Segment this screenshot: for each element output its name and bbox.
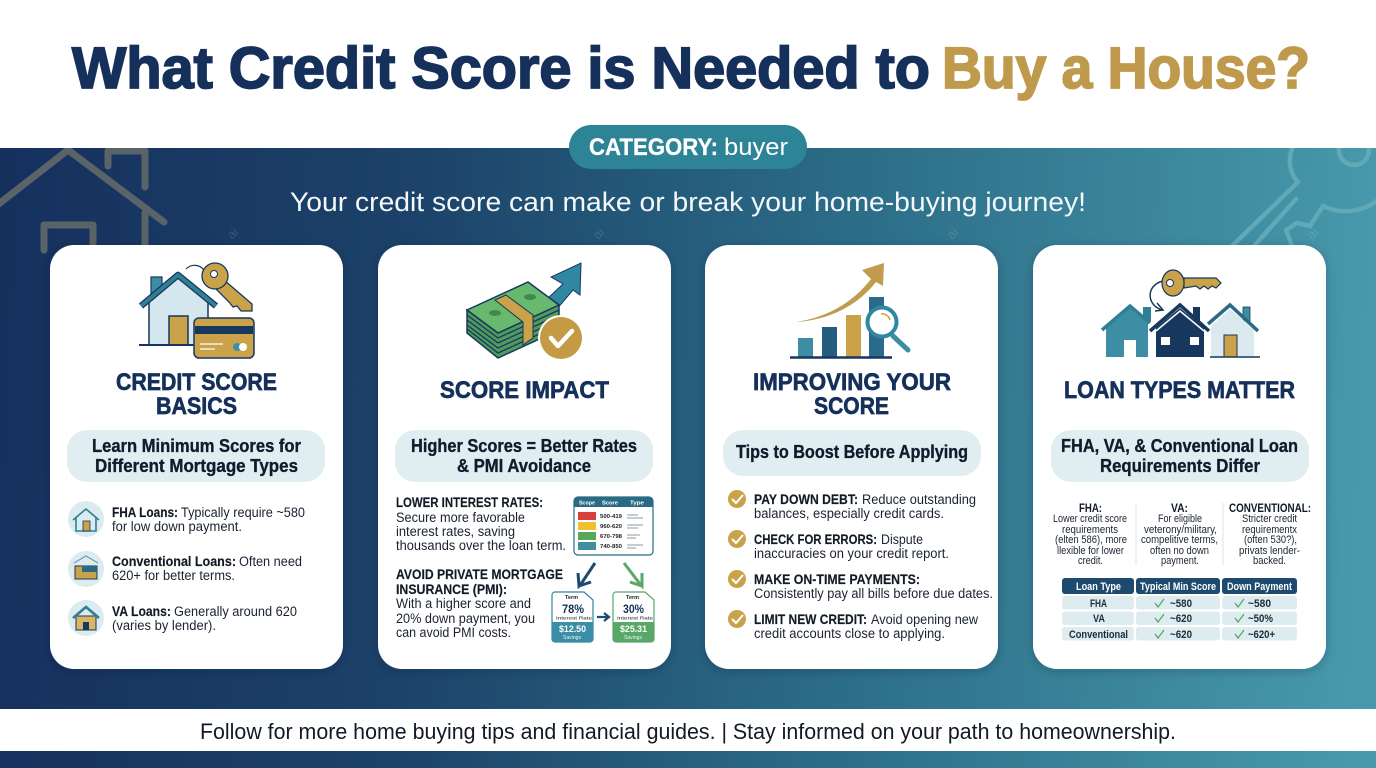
chart: score table: Type [630, 500, 644, 506]
lower interest rates text [396, 495, 566, 553]
tip: pay down debt: balances, especially credit cards. [754, 506, 944, 521]
icon: FHA house [68, 501, 104, 537]
table: loan comparison: FHA [1090, 598, 1107, 610]
column: conventional: (often 530?), [1244, 534, 1297, 546]
tip: make on-time payments: Consistently pay all bills before due dates. [754, 586, 993, 601]
column: VA: often no down [1150, 545, 1209, 557]
FHA loans text [112, 505, 305, 534]
column: FHA [1053, 501, 1127, 567]
column: VA: veterony/military, [1144, 524, 1217, 536]
panel: loan types matter [1033, 245, 1326, 669]
tip: check for errors: CHECK FOR ERRORS: [754, 532, 877, 547]
column: VA: payment. [1161, 555, 1199, 567]
column: VA [1141, 501, 1218, 567]
lower interest rates text: LOWER INTEREST RATES: [396, 495, 543, 510]
watermarks: ai [1304, 224, 1321, 242]
tip: pay down debt: Reduce outstanding [862, 492, 976, 507]
tip: pay down debt: PAY DOWN DEBT: [754, 492, 858, 507]
icon: three houses and key [1102, 270, 1260, 357]
tip: limit new credit [728, 610, 978, 641]
subheading pill [67, 430, 325, 482]
heading: IMPROVING YOUR [753, 369, 951, 396]
tip: check for errors [728, 530, 949, 561]
tip: make on-time payments [728, 570, 993, 601]
chart: score table: Scope [579, 500, 595, 506]
footer bar [0, 709, 1376, 751]
title: Buy a House? [942, 36, 1310, 101]
lower interest rates text: thousands over the loan term. [396, 538, 566, 553]
conventional loans text [112, 554, 302, 583]
category pill: CATEGORY: [589, 134, 718, 161]
VA loans text [112, 604, 297, 633]
column: FHA: (elten 586), more [1055, 534, 1127, 546]
table: loan comparison: ~620 [1170, 629, 1192, 641]
column: VA: For eligible [1158, 513, 1202, 525]
VA loans text: (varies by lender). [112, 618, 216, 633]
heading: BASICS [156, 393, 237, 420]
tip: limit new credit: LIMIT NEW CREDIT: [754, 612, 867, 627]
column: FHA: llexible for lower [1057, 545, 1124, 557]
tip: limit new credit: credit accounts close to applying. [754, 626, 945, 641]
icon: document with 30% [613, 592, 654, 642]
tip: check for errors: Dispute [881, 532, 923, 547]
icon: document with 78%: Savings [563, 635, 581, 641]
column: FHA: credit. [1078, 555, 1103, 567]
category pill: buyer [724, 134, 788, 161]
FHA loans text: FHA Loans: [112, 505, 178, 520]
table: loan comparison: ~580 [1170, 598, 1192, 610]
icon: conventional house [68, 551, 104, 587]
lower interest rates text: Secure more favorable [396, 510, 525, 525]
chart: score table: 670-798 [600, 534, 622, 540]
avoid PMI text: 20% down payment, you [396, 611, 535, 626]
table: loan comparison [1062, 578, 1297, 641]
watermarks: ai [224, 224, 241, 242]
icon: document with 78%: 78% [562, 602, 584, 616]
tip: make on-time payments: MAKE ON-TIME PAYMENTS: [754, 572, 920, 587]
column: FHA: Lower credit score [1053, 513, 1127, 525]
table: loan comparison: ~50% [1248, 613, 1273, 625]
icon: document with 78% [552, 592, 593, 642]
ghost key icon [1230, 148, 1376, 245]
panel: credit score basics [50, 245, 343, 669]
column: VA: VA: [1171, 501, 1188, 515]
heading [116, 369, 277, 420]
icon: document with 78%: Term [565, 595, 579, 601]
column: conventional: requirementx [1242, 524, 1297, 536]
avoid PMI text: INSURANCE (PMI): [396, 582, 507, 597]
chart: score table [574, 497, 653, 555]
heading [753, 369, 951, 420]
lower interest rates text: interest rates, saving [396, 524, 515, 539]
icon: document with 78%: Interest Rate [556, 616, 593, 620]
heading: CREDIT SCORE [116, 369, 277, 396]
icon: document with 30%: Savings [624, 635, 642, 641]
icon: money stack with arrow and check [467, 263, 584, 361]
icon: house, key and credit card [139, 263, 254, 358]
icon: document with 78%: $12.50 [559, 624, 586, 634]
avoid PMI text: With a higher score and [396, 596, 531, 611]
tip: limit new credit: Avoid opening new [871, 612, 978, 627]
icon: VA house [68, 600, 104, 636]
table: loan comparison: Typical Min Score [1140, 581, 1216, 593]
title: What Credit Score is Needed to [72, 36, 930, 101]
subheading pill: Different Mortgage Types [95, 456, 298, 476]
column: VA: compelitive terms, [1141, 534, 1218, 546]
conventional loans text: Conventional Loans: [112, 554, 236, 569]
VA loans text: Generally around 620 [174, 604, 297, 619]
chart: score table: 740-850 [600, 544, 622, 550]
category pill [569, 125, 807, 169]
panel: score impact [378, 245, 671, 669]
icon: document with 30%: Term [626, 595, 640, 601]
icon: rising bar chart with magnifier [790, 263, 908, 358]
column: FHA: FHA: [1079, 501, 1102, 515]
footer bar: Follow for more home buying tips and financial guides. | Stay informed on your path to homeownership. [200, 719, 1176, 744]
subheading pill: Learn Minimum Scores for [92, 436, 301, 456]
chart: score table: Score [602, 500, 618, 506]
icon: document with 30%: $25.31 [620, 624, 647, 634]
table: loan comparison: ~580 [1248, 598, 1271, 610]
subheading pill [723, 430, 981, 476]
avoid PMI text: can avoid PMI costs. [396, 625, 511, 640]
arrow: to right document [624, 563, 642, 586]
subheading pill: Requirements Differ [1100, 456, 1260, 476]
column: conventional: CONVENTIONAL: [1229, 501, 1311, 515]
arrow: to left document [578, 563, 595, 586]
FHA loans text: Typically require ~580 [181, 505, 305, 520]
column: conventional: Stricter credit [1242, 513, 1297, 525]
tip: check for errors: inaccuracies on your credit report. [754, 546, 949, 561]
table: loan comparison: Conventional [1069, 629, 1128, 641]
VA loans text: VA Loans: [112, 604, 171, 619]
conventional loans text: Often need [239, 554, 302, 569]
panel: improving your score [705, 245, 998, 669]
conventional loans text: 620+ for better terms. [112, 568, 235, 583]
table: loan comparison: Down Payment [1227, 581, 1292, 593]
watermarks: ai [944, 224, 961, 242]
heading: LOAN TYPES MATTER [1064, 377, 1295, 404]
table: loan comparison: VA [1093, 613, 1105, 625]
subheading pill: & PMI Avoidance [457, 456, 591, 476]
column: FHA: requirements [1062, 524, 1118, 536]
column: conventional: privats lender- [1239, 545, 1300, 557]
watermarks [224, 224, 1321, 242]
chart: score table: 500-419 [600, 514, 622, 520]
icon: document with 30%: 30% [623, 602, 644, 616]
ghost house icon [0, 150, 164, 250]
arrow: between documents [597, 613, 609, 621]
column: conventional [1229, 501, 1311, 567]
FHA loans text: for low down payment. [112, 519, 242, 534]
heading: SCORE IMPACT [440, 377, 609, 404]
subheading pill: Higher Scores = Better Rates [411, 436, 637, 456]
avoid PMI text: AVOID PRIVATE MORTGAGE [396, 567, 563, 582]
column: conventional: backed. [1253, 555, 1286, 567]
icon: document with 30%: Interest Rate [617, 616, 654, 620]
subheading pill: Tips to Boost Before Applying [736, 442, 968, 462]
tip: pay down debt [728, 490, 976, 521]
watermarks: ai [590, 224, 607, 242]
heading: SCORE [814, 393, 889, 420]
table: loan comparison: ~620+ [1248, 629, 1275, 641]
subheading pill [395, 430, 653, 482]
table: loan comparison: ~620 [1170, 613, 1192, 625]
table: loan comparison: Loan Type [1076, 581, 1121, 593]
title [72, 36, 1310, 101]
tagline: Your credit score can make or break your home-buying journey! [290, 187, 1086, 217]
chart: score table: 960-620 [600, 524, 622, 530]
subheading pill: FHA, VA, & Conventional Loan [1061, 436, 1298, 456]
subheading pill [1051, 430, 1309, 482]
avoid PMI text [396, 567, 563, 640]
